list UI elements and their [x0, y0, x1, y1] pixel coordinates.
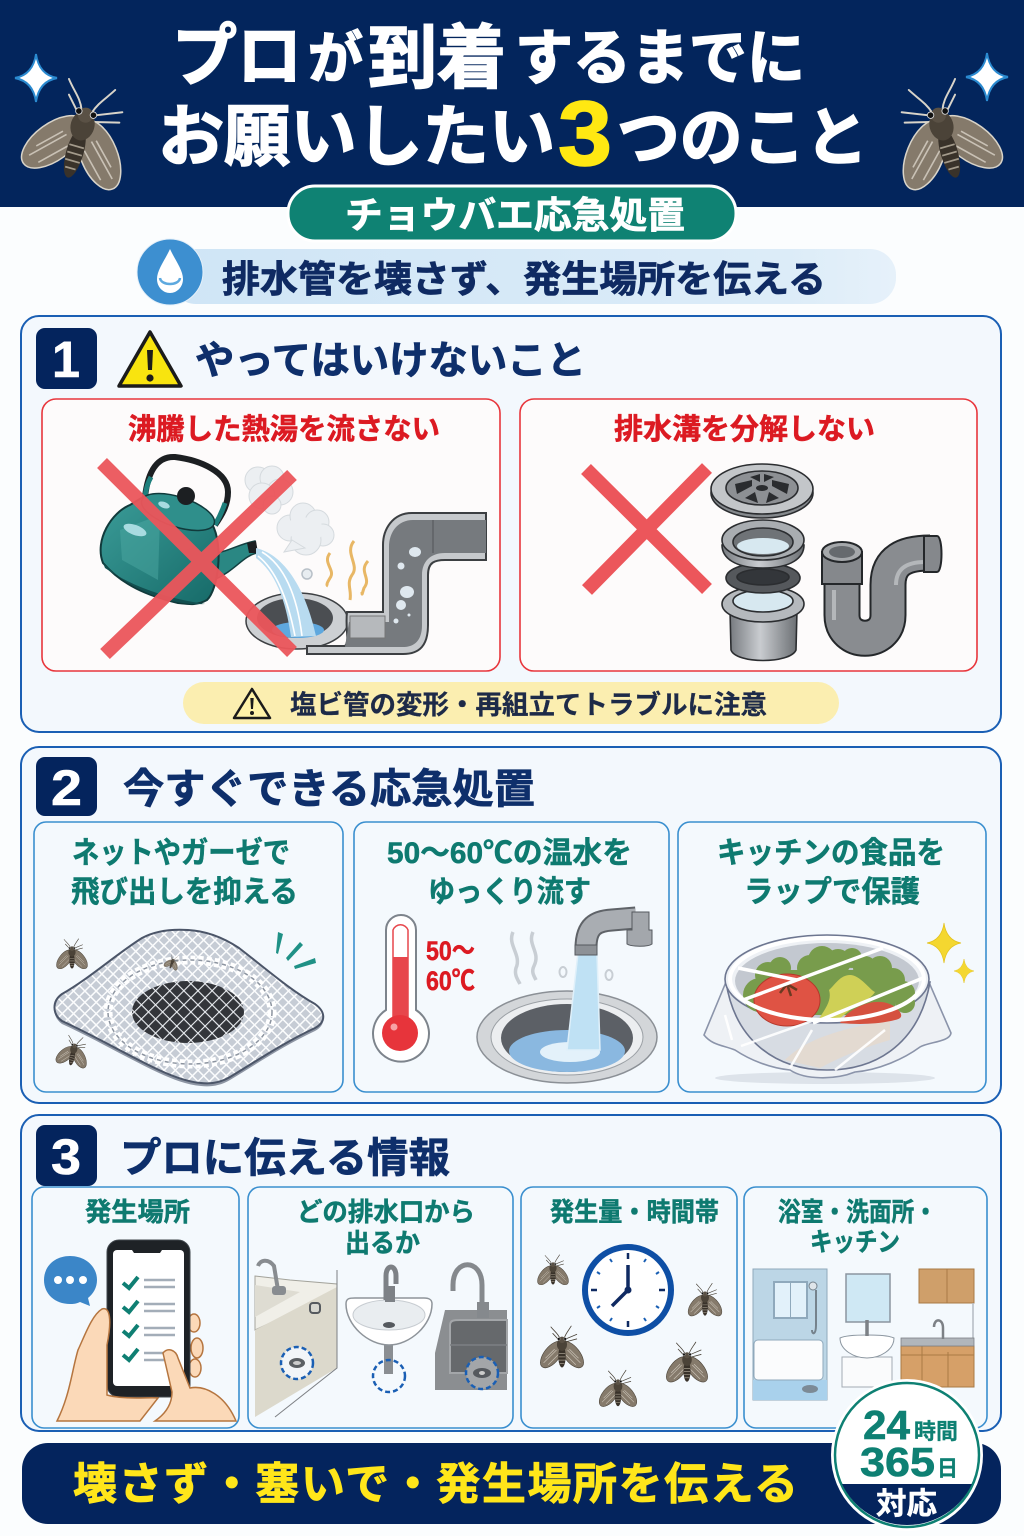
subtitle pill	[288, 186, 736, 241]
illustration: clock	[585, 1247, 671, 1333]
footer slogan band	[22, 1443, 1001, 1524]
subtitle pill: チョウバエ応急処置	[345, 195, 685, 236]
card: do not disassemble drain: 排水溝を分解しない	[614, 413, 875, 446]
card: amount and time	[521, 1187, 737, 1428]
lead message bar: 排水管を壊さず、発生場所を伝える	[222, 259, 826, 300]
footer slogan band: 壊さず・塞いで・発生場所を伝える	[73, 1460, 798, 1509]
title: つのこと	[617, 102, 868, 174]
illustration: drain pipe	[246, 513, 486, 654]
icon: right drain fly	[871, 67, 1018, 204]
icon: left drain fly	[6, 67, 153, 204]
icon: chat bubble	[44, 1256, 97, 1306]
illustration: hand	[57, 1309, 236, 1421]
card: wrap food: ラップで保護	[744, 876, 920, 909]
badge: 24 hours 365 days: 日	[937, 1456, 958, 1481]
drain highlight: washbasin	[373, 1360, 405, 1392]
number badge 3: 3	[51, 1129, 81, 1185]
panel: section 1 what not to do	[21, 316, 1001, 732]
icon: water drop	[137, 239, 203, 305]
illustration: S trap pipe	[822, 536, 942, 638]
card: rooms: キッチン	[810, 1227, 900, 1257]
illustration: steam clouds	[245, 466, 334, 579]
card: which drain	[248, 1187, 513, 1428]
title: が	[308, 27, 363, 90]
title: お願いしたい	[158, 100, 555, 175]
illustration: steam and drops	[512, 932, 612, 984]
illustration: bathtub	[255, 1261, 337, 1417]
caution note bar	[183, 682, 839, 724]
illustration: kettle	[101, 457, 258, 604]
icon: warning triangle	[119, 332, 181, 386]
card: net cover: 飛び出しを抑える	[71, 876, 298, 909]
icon: drain flies	[534, 1255, 725, 1410]
card: wrap food: キッチンの食品を	[717, 837, 945, 870]
card: warm water	[354, 822, 669, 1092]
illustration: pouring water	[256, 548, 316, 637]
illustration: wrapped bowl	[704, 935, 951, 1084]
badge: 24 hours 365 days: 365	[860, 1439, 935, 1485]
icon: small warning triangle	[234, 689, 270, 718]
title: 到着	[368, 19, 506, 97]
card: wrap food	[678, 822, 986, 1092]
panel: section 2 immediate measures	[21, 747, 1001, 1103]
badge: 24 hours 365 days: 24	[863, 1402, 910, 1448]
card: no boiling water	[42, 399, 500, 671]
card: warm water: ゆっくり流す	[428, 876, 591, 909]
icon: flies on net	[52, 939, 183, 1072]
illustration: kitchen sink	[435, 1265, 507, 1390]
illustration: bathroom	[753, 1269, 827, 1400]
title: するまでに	[515, 25, 805, 92]
cross mark	[102, 463, 292, 654]
icon: right sparkle	[966, 53, 1008, 101]
illustration: smartphone checklist	[107, 1240, 190, 1397]
icon: teal motion marks	[276, 932, 316, 969]
illustration: kitchen	[901, 1269, 974, 1387]
illustration: sink drain	[477, 991, 657, 1083]
heading: do not: やってはいけないこと	[195, 340, 586, 383]
illustration: thermometer	[373, 915, 429, 1062]
card: warm water: 50〜60℃の温水を	[387, 837, 632, 870]
temperature label	[426, 936, 475, 996]
cross mark	[586, 468, 707, 590]
illustration: vanity	[840, 1274, 894, 1387]
card: location	[32, 1187, 239, 1428]
number badge 1	[36, 328, 97, 389]
illustration: drain net	[54, 930, 323, 1086]
heading: immediate measures: 今すぐできる応急処置	[123, 766, 535, 812]
icon: sparkles	[927, 923, 974, 983]
illustration: water stream	[567, 953, 600, 1050]
illustration: faucet	[575, 912, 652, 955]
title: 3	[558, 83, 612, 185]
illustration: drain parts	[711, 464, 813, 660]
badge: 24 hours 365 days	[831, 1379, 983, 1531]
illustration: heat squiggles	[327, 541, 368, 600]
heading: info for the pro: プロに伝える情報	[120, 1135, 450, 1181]
card: location: 発生場所	[85, 1197, 190, 1227]
header band	[0, 0, 1024, 207]
illustration: back fingers	[188, 1314, 203, 1377]
card: which drain: 出るか	[345, 1228, 420, 1258]
title: プロ	[172, 19, 302, 95]
number badge 1: 1	[52, 331, 80, 388]
card: do not disassemble drain	[520, 399, 977, 671]
badge: 24 hours 365 days: 対応	[876, 1488, 937, 1521]
number badge 2: 2	[51, 760, 82, 816]
card: net cover	[34, 822, 343, 1092]
temperature label: 60℃	[426, 966, 475, 996]
card: rooms: 浴室・洗面所・	[778, 1197, 937, 1227]
card: no boiling water: 沸騰した熱湯を流さない	[128, 413, 440, 446]
number badge 3	[36, 1125, 97, 1186]
title	[158, 19, 868, 185]
panel: section 3 info for the pro	[21, 1115, 1001, 1431]
icon: left sparkle	[15, 54, 57, 102]
caution note bar: 塩ビ管の変形・再組立てトラブルに注意	[290, 690, 767, 720]
drain highlight: kitchen sink	[466, 1357, 498, 1389]
drain highlight: bathtub	[281, 1347, 313, 1379]
lead message bar	[137, 239, 896, 305]
temperature label: 50〜	[426, 936, 475, 966]
card: rooms	[744, 1187, 987, 1428]
number badge 2	[36, 757, 97, 816]
card: amount and time: 発生量・時間帯	[550, 1197, 719, 1227]
card: which drain: どの排水口から	[297, 1197, 475, 1227]
badge: 24 hours 365 days: 時間	[914, 1419, 958, 1444]
illustration: washbasin	[346, 1267, 432, 1374]
card: net cover: ネットやガーゼで	[72, 837, 290, 870]
